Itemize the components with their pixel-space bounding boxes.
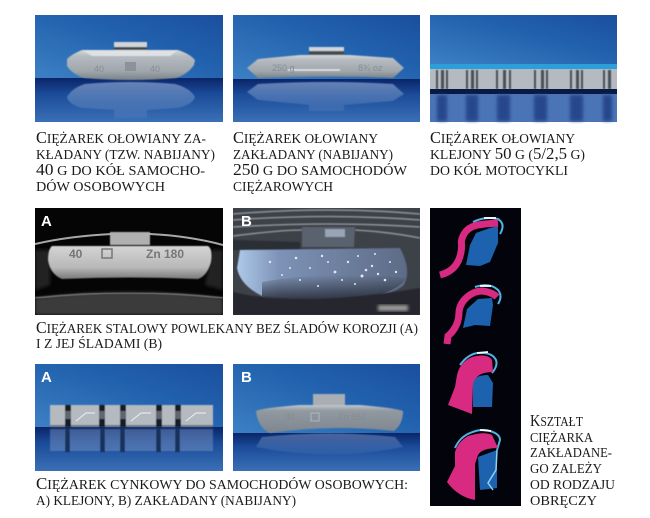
photo: lead clip-on weight 40 g: 40	[150, 64, 160, 74]
caption: shape depends on rim type: GO ZALEŻY	[530, 461, 602, 476]
caption: adhesive lead weight: CIĘŻAREK OŁOWIANY	[430, 128, 575, 147]
caption: lead clip-on 250 g: 250 G DO SAMOCHODÓW	[233, 160, 407, 179]
caption: lead clip-on 250 g: ZAKŁADANY (NABIJANY)	[233, 147, 393, 162]
photo: adhesive lead weight strip	[430, 15, 617, 122]
diagram 3	[448, 352, 496, 414]
photo: lead clip-on weight 250 g: 250 g	[272, 63, 295, 73]
caption: zinc weight: CIĘŻAREK CYNKOWY DO SAMOCHODÓW OSOBOWYCH:	[36, 474, 408, 493]
photo B: clip-on zinc weight: 40	[285, 412, 295, 422]
caption: shape depends on rim type: KSZTAŁT	[530, 411, 584, 430]
caption: zinc weight	[36, 474, 408, 508]
caption: lead clip-on 40 g: KŁADANY (TZW. NABIJANY)	[36, 147, 215, 162]
photo A: adhesive zinc weight	[35, 364, 223, 471]
panel: rim profile diagrams	[430, 208, 521, 506]
caption: shape depends on rim type: ZAKŁADANE-	[530, 445, 612, 460]
photo: lead clip-on weight 40 g	[35, 15, 223, 122]
photo B: coated steel weight with corrosion	[233, 208, 420, 315]
label: A: A	[41, 369, 52, 386]
caption: shape depends on rim type	[530, 411, 615, 508]
label: A: A	[41, 213, 52, 230]
caption: adhesive lead weight: KLEJONY 50 G (5/2,5 G)	[430, 144, 585, 163]
photo B: clip-on zinc weight	[233, 364, 420, 471]
caption: adhesive lead weight: DO KÓŁ MOTOCYKLI	[430, 163, 569, 178]
diagram 1	[440, 218, 503, 275]
caption: shape depends on rim type: CIĘŻARKA	[530, 430, 593, 445]
caption: coated steel weight: CIĘŻAREK STALOWY POWLEKANY BEZ ŚLADÓW KOROZJI (A)	[36, 318, 418, 337]
diagram 4	[447, 430, 500, 500]
caption: shape depends on rim type: OD RODZAJU	[530, 477, 615, 492]
photo B: clip-on zinc weight: Zn 662	[338, 412, 366, 422]
caption: adhesive lead weight	[430, 128, 585, 178]
caption: lead clip-on 40 g	[36, 128, 215, 194]
caption: lead clip-on 40 g: 40 G DO KÓŁ SAMOCHO-	[36, 160, 206, 179]
diagram 2	[447, 285, 500, 344]
caption: coated steel weight	[36, 318, 418, 351]
photo A: coated steel weight without corrosion	[35, 208, 223, 315]
caption: lead clip-on 250 g: CIĘŻAREK OŁOWIANY	[233, 128, 378, 147]
caption: lead clip-on 40 g: CIĘŻAREK OŁOWIANY ZA-	[36, 128, 206, 147]
photo A: coated steel weight without corrosion: Zn 180	[146, 247, 184, 261]
caption: lead clip-on 40 g: DÓW OSOBOWYCH	[36, 179, 165, 194]
label: B: B	[241, 369, 252, 386]
caption: shape depends on rim type: OBRĘCZY	[530, 493, 597, 508]
caption: lead clip-on 250 g	[233, 128, 407, 194]
label: B: B	[241, 213, 252, 230]
caption: lead clip-on 250 g: CIĘŻAROWYCH	[233, 179, 333, 194]
caption: zinc weight: A) KLEJONY, B) ZAKŁADANY (NABIJANY)	[36, 493, 296, 508]
caption: coated steel weight: I Z JEJ ŚLADAMI (B)	[36, 336, 162, 351]
photo: lead clip-on weight 40 g: 40	[94, 64, 104, 74]
photo A: coated steel weight without corrosion: 40	[69, 247, 83, 261]
photo: lead clip-on weight 250 g	[233, 15, 420, 122]
photo: lead clip-on weight 250 g: 8¾ oz	[358, 63, 383, 73]
